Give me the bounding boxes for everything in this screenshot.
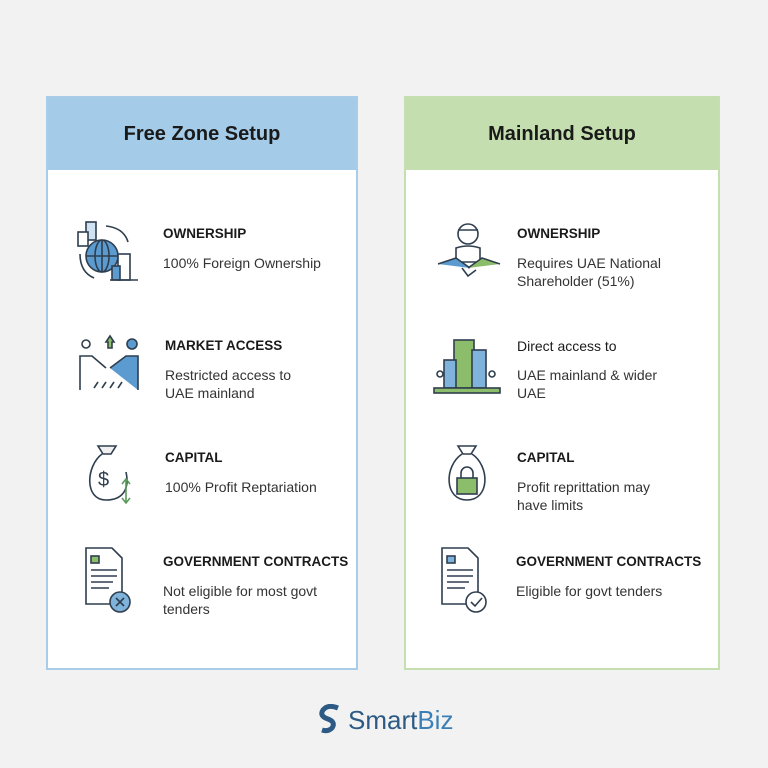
heading: free zone: Free Zone Setup xyxy=(124,122,280,144)
row: market access xyxy=(433,338,657,401)
text: ownership xyxy=(163,226,321,271)
row: government contracts: GOVERNMENT CONTRACTS xyxy=(516,554,701,569)
row: capital: CAPITAL xyxy=(165,450,222,465)
row: capital: Profit reprittation may xyxy=(517,479,650,495)
row: ownership: Requires UAE National xyxy=(517,255,661,271)
icon: handshake xyxy=(79,334,139,390)
icon: person handshake xyxy=(438,223,500,278)
row: government contracts xyxy=(85,547,348,617)
row: capital: 100% Profit Reptariation xyxy=(165,479,317,495)
row: government contracts: tenders xyxy=(163,601,210,617)
row: ownership: 100% Foreign Ownership xyxy=(163,255,321,271)
heading: free zone xyxy=(48,98,356,170)
row: government contracts: GOVERNMENT CONTRACTS xyxy=(163,554,348,569)
text: capital xyxy=(517,450,650,513)
text: government contracts xyxy=(516,554,701,599)
row: market access: UAE mainland xyxy=(165,385,254,401)
row: government contracts: Not eligible for most govt xyxy=(163,583,317,599)
row: government contracts: Eligible for govt tenders xyxy=(516,583,662,599)
row: market access: UAE mainland & wider xyxy=(517,367,657,383)
row: market access: MARKET ACCESS xyxy=(165,338,282,353)
logo: SmartBiz: SmartBiz xyxy=(348,704,453,734)
heading: mainland xyxy=(406,98,718,170)
row: capital: CAPITAL xyxy=(517,450,574,465)
row: capital: have limits xyxy=(517,497,583,513)
icon: bag with lock xyxy=(448,445,486,501)
icon: document with x xyxy=(85,547,131,613)
row: market access xyxy=(79,334,291,401)
icon: money bag xyxy=(88,445,130,504)
row: ownership: OWNERSHIP xyxy=(517,226,600,241)
row: capital xyxy=(88,445,317,504)
row: capital xyxy=(448,445,650,513)
heading: mainland: Mainland Setup xyxy=(488,122,636,144)
row: market access: Restricted access to xyxy=(165,367,291,383)
text: market access xyxy=(517,338,657,401)
icon: document with check xyxy=(441,547,487,613)
icon: money bag: $ xyxy=(98,469,109,491)
row: ownership: Shareholder (51%) xyxy=(517,273,635,289)
row: government contracts xyxy=(441,547,701,613)
icon: buildings xyxy=(433,339,501,394)
icon: globe buildings xyxy=(77,221,138,281)
text: market access xyxy=(165,338,291,401)
row: ownership xyxy=(438,223,661,289)
row: ownership xyxy=(77,221,321,281)
text: ownership xyxy=(517,226,661,289)
row: ownership: OWNERSHIP xyxy=(163,226,246,241)
icon: logo S xyxy=(319,704,339,734)
text: government contracts xyxy=(163,554,348,617)
row: market access: UAE xyxy=(517,385,546,401)
panel: mainland xyxy=(404,96,720,670)
text: capital xyxy=(165,450,317,495)
panel: free zone xyxy=(46,96,358,670)
row: market access: Direct access to xyxy=(517,338,617,354)
